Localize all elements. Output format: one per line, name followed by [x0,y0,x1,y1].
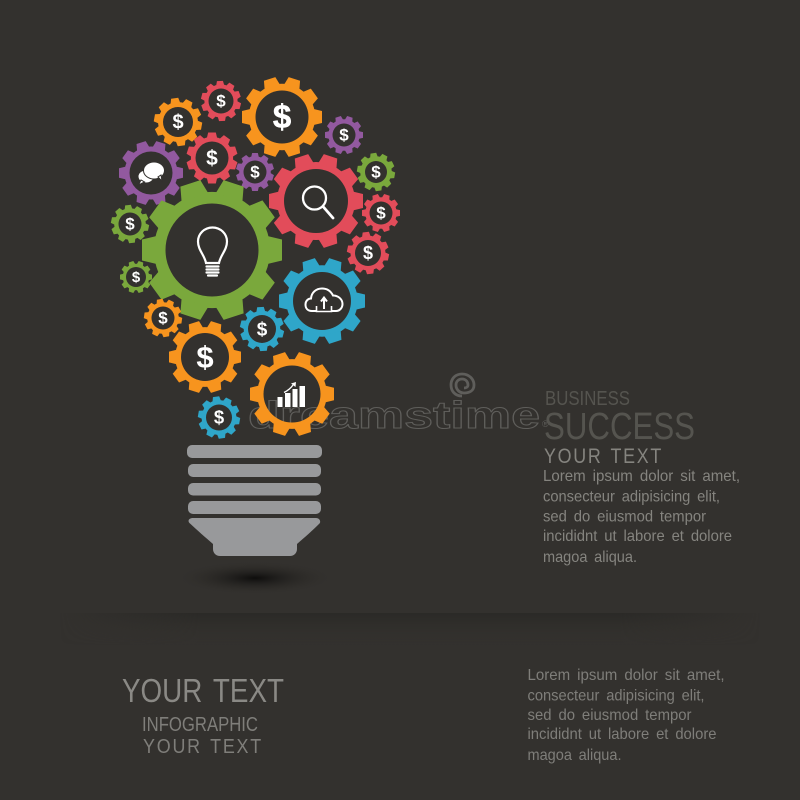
gear: orange medium dollar: $ [196,340,214,374]
gear: green small dollar right [354,150,398,194]
icon: light bulb [198,228,227,276]
gear: red small dollar right [362,194,400,232]
gear: green small dollar right: $ [371,163,381,182]
gear: blue small dollar bottom [195,393,243,442]
text block: bottom lorem: consecteur adipisicing elit, [528,688,704,704]
heading: bottom your text: YOUR TEXT [122,672,284,709]
text block: right lorem: magoa aliqua. [543,549,637,566]
watermark: dreamstime [248,395,540,437]
gear: green large bulb [142,179,282,321]
text block: right lorem [543,468,740,566]
gear: orange chart [250,351,334,437]
text block: right lorem: incididnt ut labore et dolore [543,528,732,545]
gear: green small dollar left [107,201,153,247]
gear: red small dollar lower right: $ [363,243,373,263]
gear: orange small dollar: $ [172,112,184,134]
gear: red magnifier [269,153,363,249]
text block: bottom lorem: magoa aliqua. [528,747,622,764]
gear: blue small dollar [235,302,289,356]
gear: blue small dollar: $ [257,319,268,340]
gear: red small dollar top [196,76,246,126]
gear: purple small dollar right: $ [339,126,349,145]
gear: purple small dollar center [231,148,279,196]
gear: orange large dollar [242,76,322,158]
heading: success: SUCCESS [544,406,695,448]
icon: magnifier [303,186,333,218]
gear: green small dollar lower left: $ [132,269,141,286]
watermark: ® [542,419,549,429]
bulb base [187,445,322,556]
text block: bottom lorem: sed do eiusmod tempor [528,707,692,724]
icon: chat bubbles [138,162,164,185]
text block: bottom lorem: incididnt ut labore et dolore [528,726,717,743]
watermark spiral [451,374,474,396]
gear: red small dollar top: $ [216,92,226,111]
label: your text: YOUR TEXT [143,736,263,758]
bulb shadow [175,561,335,595]
gear: blue small dollar bottom: $ [214,407,225,428]
gear: red dollar: $ [206,147,218,170]
gear: red small dollar right: $ [376,204,386,223]
label: infographic: INFOGRAPHIC [142,714,258,736]
gear: orange small dollar left [142,296,184,340]
gear: red dollar [180,126,244,190]
gear: red small dollar lower right [343,228,393,278]
watermark [248,374,549,437]
gear: purple small dollar center: $ [250,163,260,182]
text block: bottom lorem: Lorem ipsum dolor sit amet, [528,667,724,684]
gear: green small dollar lower left [120,261,152,293]
text block: right lorem: sed do eiusmod tempor [543,508,707,526]
gear: purple chat [119,141,183,205]
gear: purple small dollar right [325,116,363,154]
icon: bar chart with arrow [278,382,305,407]
subheading: your text: YOUR TEXT [544,445,663,468]
icon: cloud upload [306,288,342,312]
gear: blue cloud [279,257,365,345]
text block: right lorem: consecteur adipisicing elit, [543,488,720,506]
gear: green small dollar left: $ [125,215,135,234]
text block: bottom lorem [528,667,724,764]
gear: orange medium dollar [169,321,241,393]
text block: right lorem: Lorem ipsum dolor sit amet, [543,468,740,485]
heading: business: BUSINESS [545,388,630,410]
gear: orange small dollar left: $ [158,309,168,328]
gear: orange small dollar [150,94,206,150]
floor shadow band [186,613,634,614]
gear: orange large dollar: $ [273,98,291,135]
